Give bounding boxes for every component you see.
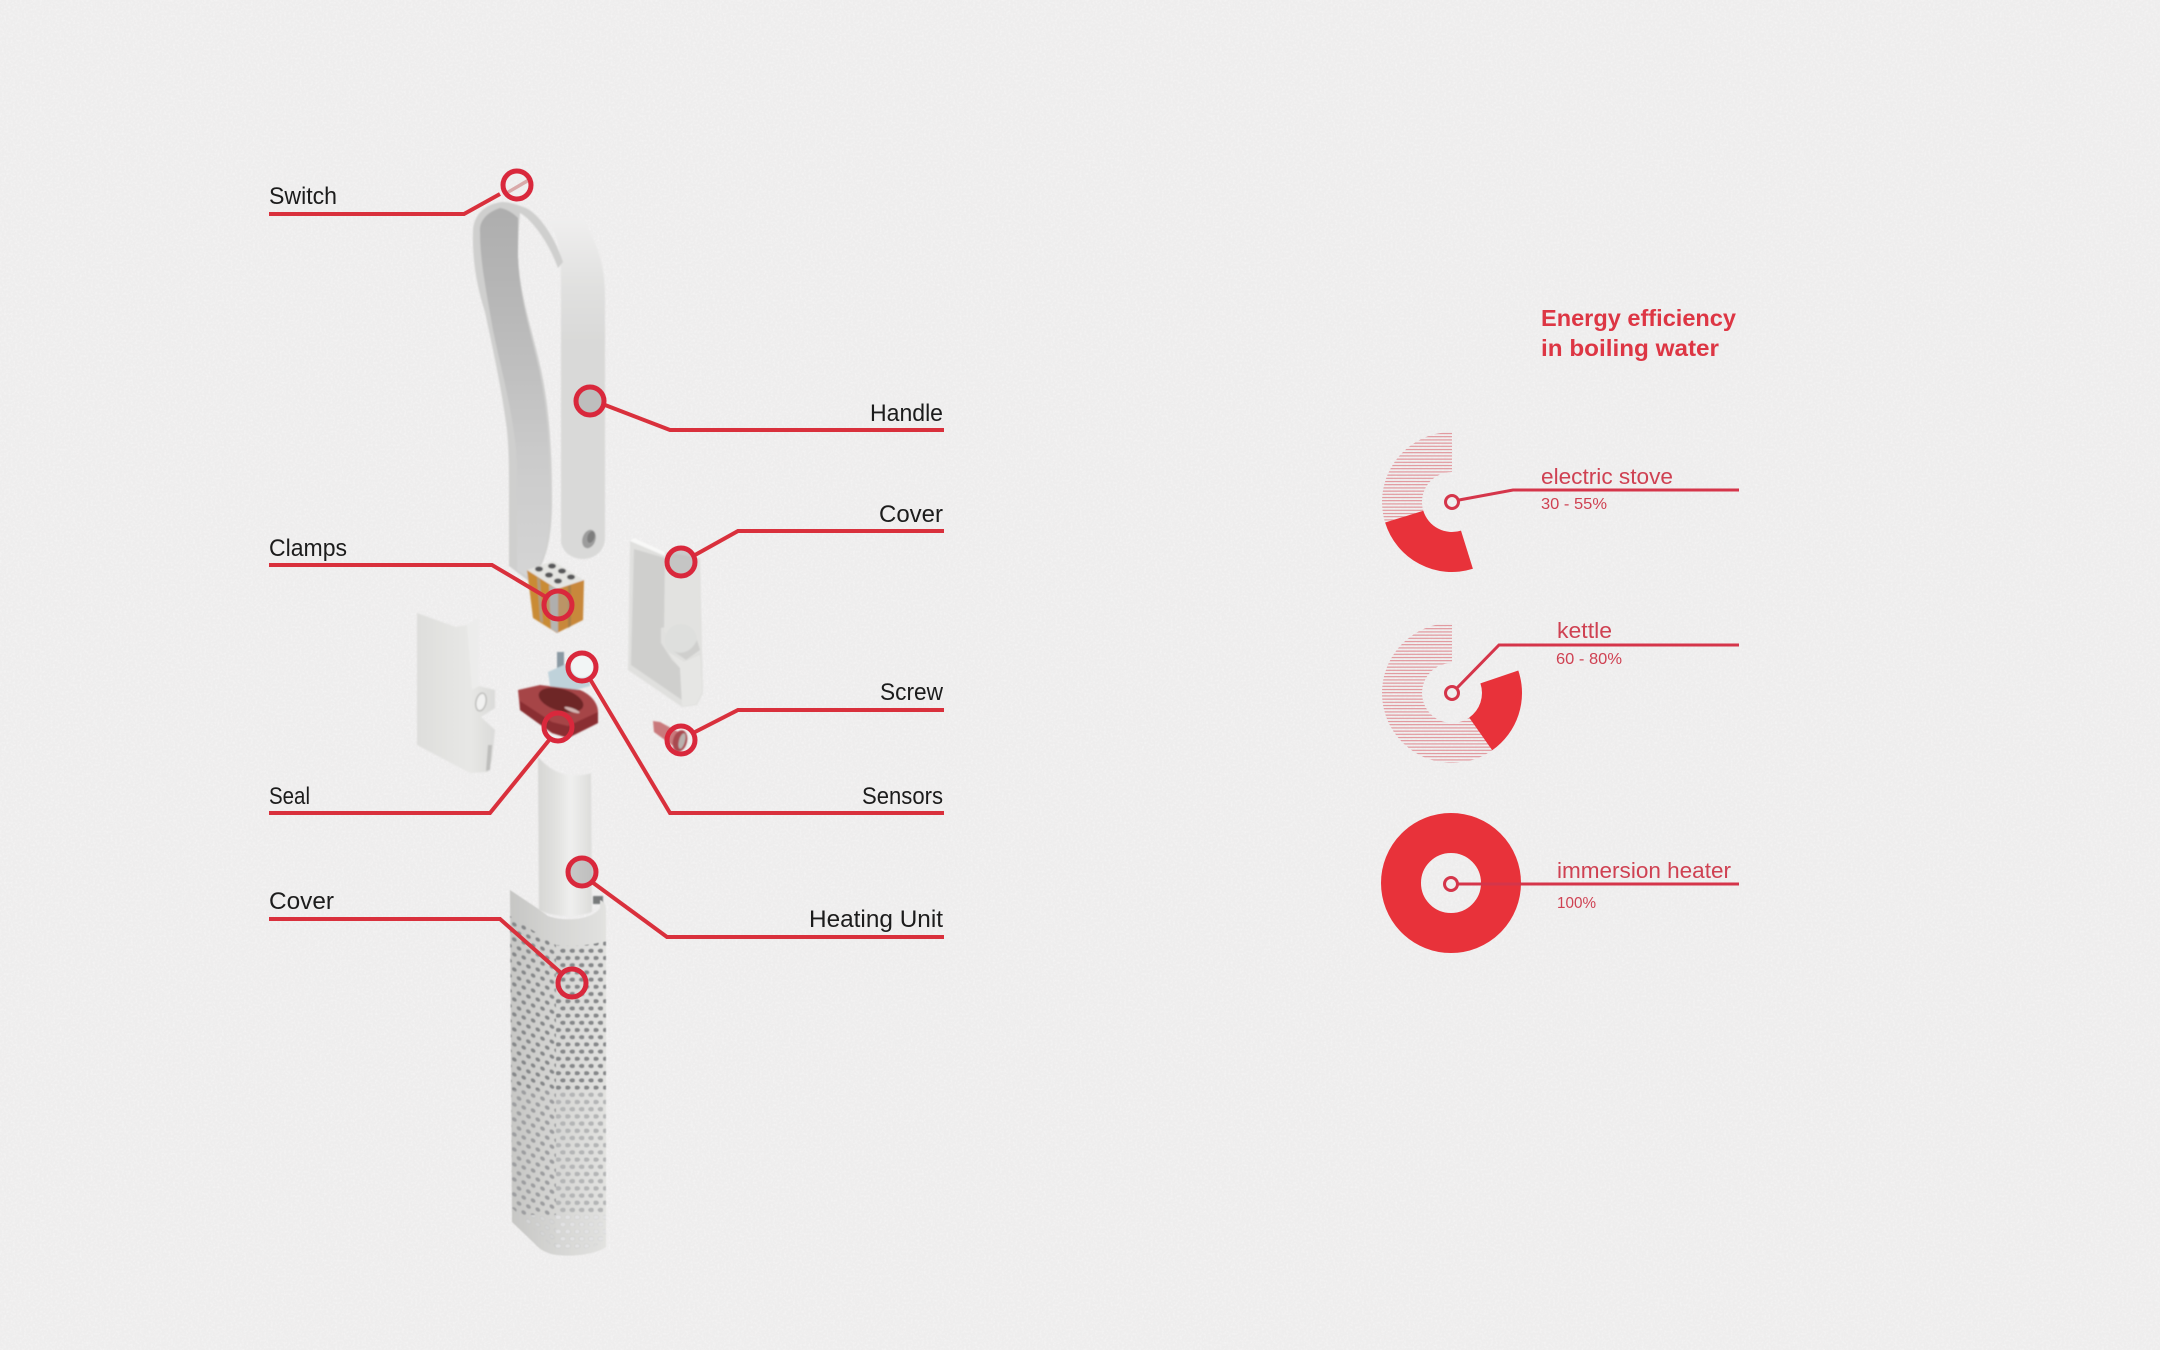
perforated cover [505, 890, 610, 1260]
screw [653, 721, 690, 753]
centre marker [1444, 878, 1458, 890]
title: energy efficiency: Energy efficiency [1541, 305, 1736, 331]
title: energy efficiency: in boiling water [1541, 335, 1719, 361]
callout: Cover (upper): Cover [879, 501, 943, 528]
leader line [1459, 490, 1739, 500]
efficiency arc [1469, 670, 1522, 750]
title: energy efficiency [1541, 305, 1736, 361]
sensors [548, 652, 593, 692]
callout: Heating Unit [568, 858, 944, 937]
callout: Sensors: Sensors [862, 783, 943, 810]
middle cover (left) [417, 613, 495, 773]
callout: Handle: Handle [870, 400, 943, 427]
callout: Cover (lower): Cover [269, 888, 334, 915]
centre marker [1446, 686, 1458, 700]
value: 100% [1557, 895, 1596, 912]
label: electric stove [1541, 464, 1673, 489]
callout: Cover (upper) [667, 501, 944, 576]
callout: Switch [269, 171, 531, 214]
centre marker [1446, 496, 1458, 508]
callout: Seal [269, 713, 572, 813]
callout: Heating Unit: Heating Unit [809, 906, 943, 933]
callout: Seal: Seal [269, 783, 310, 810]
seal [518, 683, 598, 738]
chart: immersion heater [1401, 833, 1739, 933]
handle [473, 202, 605, 582]
value: 60 - 80% [1556, 651, 1622, 668]
callout: Handle [576, 387, 944, 430]
leader line [1457, 645, 1739, 688]
chart: electric stove [1382, 432, 1739, 572]
chart: kettle [1382, 618, 1739, 763]
hatched remainder arc [1382, 623, 1492, 763]
label: immersion heater [1557, 858, 1731, 883]
value: 30 - 55% [1541, 496, 1607, 513]
callout: Sensors [568, 653, 944, 813]
callout: Screw: Screw [880, 679, 943, 706]
hatched remainder arc [1382, 432, 1452, 522]
callout: Clamps: Clamps [269, 535, 347, 562]
exploded product view [417, 202, 703, 916]
callout: Clamps [269, 535, 572, 619]
upper cover (right) [628, 538, 703, 707]
full ring [1401, 833, 1501, 933]
heating unit [538, 757, 603, 916]
callout: Screw [667, 679, 944, 754]
label: kettle [1557, 618, 1612, 643]
leader line [1457, 882, 1739, 886]
callout: Cover (lower) [269, 888, 586, 997]
efficiency arc [1385, 511, 1473, 572]
clamps block [527, 561, 584, 633]
callout: Switch: Switch [269, 183, 337, 210]
